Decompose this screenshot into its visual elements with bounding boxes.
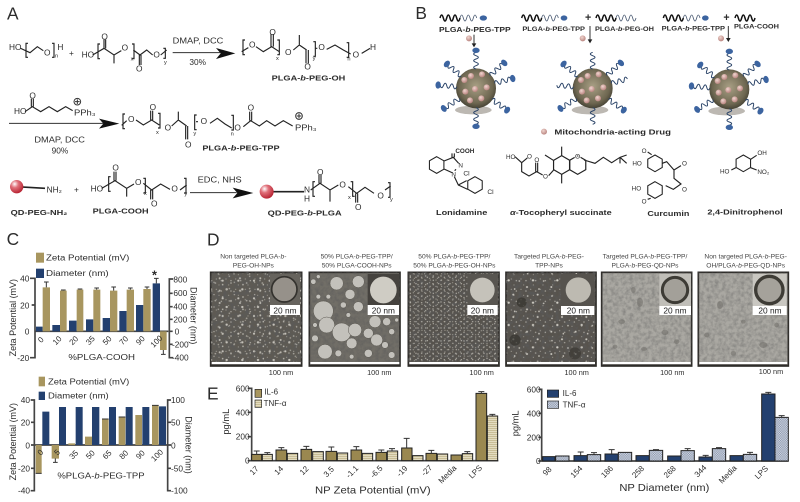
panel letter C: C [7,229,19,249]
molecule: Lonidamine: Lonidamine [436,208,487,217]
formulation 3: TPP plus COOH: PLGA-COOH [734,25,779,31]
reaction 1: reagents: O [136,64,143,74]
micrograph: non targeted PEG-OH: 20 nm [273,305,297,315]
bar chart: %PLGA-b-PEG-TPP: -40 [18,486,30,496]
molecule: Lonidamine: COOH [455,148,475,155]
product: PLGA-b-PEG-TPP: O [128,114,135,124]
arrow: DMAP, DCC 30% [173,36,235,67]
molecule: Curcumin: Curcumin [647,209,690,218]
bar chart: %PLGA-b-PEG-TPP: Zeta Potential (mV) [48,376,129,386]
bar chart: pg/mL vs NP zeta potential: Media [437,463,459,485]
bar chart: %PLGA-b-PEG-TPP: 100 [149,447,165,463]
formulation 1: PLGA-b-PEG-TPP [435,15,516,129]
micrograph: 50% TPP / 50% OH: 100 nm [469,368,494,377]
micrograph: 50% TPP / 50% OH: 20 nm [471,305,494,315]
reaction 1: reagents: y [164,60,167,66]
product: PLGA-b-PEG-OH: n [347,57,350,63]
micrograph: 50% TPP / 50% OH: 50% PLGA-b-PEG-OH-NPs [413,262,496,269]
bar chart: %PLGA-b-PEG-TPP: 50 [84,448,97,461]
molecule: alpha-Tocopheryl succinate: α-Tocopheryl succinate [510,208,612,217]
bar chart: %PLGA-b-PEG-TPP [8,376,194,496]
bar chart: %PLGA-COOH: 20 [20,300,30,310]
product: PLGA-b-PEG-TPP: O [150,102,157,112]
bar chart: %PLGA-COOH: 40 [20,274,30,284]
micrograph: 50% TPP / 50% OH: 50% PLGA-b-PEG-TPP/ [418,253,491,260]
micrograph: non targeted PEG-OH [211,253,302,377]
bar chart: %PLGA-COOH: -400 [172,353,189,363]
bar chart: %PLGA-b-PEG-TPP: Diameter (nm) [48,390,109,400]
bar chart: pg/mL vs NP diameter: 400 [527,408,541,418]
micrograph: 50% TPP / 50% COOH: 50% PLGA-b-PEG-TPP/ [321,253,393,260]
bar chart: %PLGA-b-PEG-TPP: 40 [21,395,30,405]
bar chart: pg/mL vs NP diameter: pg/mL [511,410,521,436]
micrograph: targeted TPP / QD: Targeted PLGA-b-PEG-TPP/ [603,253,688,260]
product: PLGA-b-PEG-OH: x [276,56,279,62]
reagent: carboxy TPP: HO [14,106,27,116]
panel B: nanoparticle formulations and drugs [415,3,783,218]
product: QD-PEG-b-PLGA: O [355,202,362,212]
panel letter B: B [415,3,427,23]
arrow: DMAP, DCC 30%: 30% [189,57,207,67]
panel letter D: D [207,230,220,250]
molecule: 2,4-Dinitrophenol [707,150,783,216]
micrograph: non targeted OH / QD: 100 nm [759,367,783,376]
micrograph: targeted TPP / QD [602,253,692,377]
product: PLGA-b-PEG-OH: O [318,42,325,52]
reaction 1: reagents: HO [82,49,95,59]
product: PLGA-b-PEG-OH: O [353,49,360,59]
reagent: QD-PEG-NH2: NH₂ [47,184,62,194]
bar chart: %PLGA-COOH: 50 [101,334,114,347]
reaction 1: reagents: HO [9,42,22,52]
panel letter E: E [207,383,219,403]
reagent: PLGA-COOH: PLGA-COOH [93,207,149,216]
reaction 1: reagents: H [57,42,63,52]
molecule: Lonidamine: Cl [463,171,470,178]
reaction 1: reagents: O [153,49,160,59]
molecule: alpha-Tocopheryl succinate [506,147,627,217]
bar chart: pg/mL vs NP diameter: 0 [536,456,541,466]
molecule: 2,4-Dinitrophenol: OH [757,150,767,157]
micrograph: 50% TPP / 50% OH [408,253,499,377]
product: QD-PEG-b-PLGA: x [348,195,351,201]
formulation 3: TPP plus COOH: PLGA- b-PEG-TPP [662,26,725,32]
plus sign: + [74,185,79,195]
bar chart: %PLGA-b-PEG-TPP: 35 [68,448,81,461]
bar chart: pg/mL vs NP zeta potential: NP Zeta Potential (mV) [315,486,431,497]
micrograph: non targeted PEG-OH: Non targeted PLGA-b- [220,253,286,260]
reaction 1: reagents: x [131,57,134,63]
bar chart: pg/mL vs NP zeta potential: TNF-α [264,399,287,408]
product: PLGA-b-PEG-TPP: PLGA-b-PEG-TPP [202,143,280,152]
product: PLGA-b-PEG-TPP: O [248,103,255,113]
panel E: cytokine release, zeta potential [207,383,498,497]
bar chart: %PLGA-b-PEG-TPP: -100 [171,486,188,496]
formulation 1: PLGA-b-PEG-TPP: PLGA-b-PEG-TPP [439,25,511,34]
bar chart: %PLGA-COOH: Diameter (nm) [46,268,109,278]
bar chart: pg/mL vs NP zeta potential: 3.5 [322,464,336,479]
bar chart: %PLGA-COOH [8,252,199,363]
bar chart: %PLGA-COOH: 0 [175,327,180,337]
molecule: alpha-Tocopheryl succinate: O [543,173,548,180]
reaction 1: reagents [9,31,167,74]
bar chart: %PLGA-b-PEG-TPP: 90 [134,448,147,461]
product: QD-PEG-b-PLGA: y [390,197,393,203]
molecule: Curcumin: O [642,148,647,155]
bar chart: pg/mL vs NP diameter: 600 [527,384,541,394]
product: PLGA-b-PEG-TPP: y [193,131,196,137]
bar chart: pg/mL vs NP zeta potential [221,383,498,497]
bar chart: %PLGA-COOH: 35 [84,334,97,347]
bar chart: %PLGA-COOH: 400 [173,301,188,311]
micrograph: targeted TPP / QD: 20 nm [663,306,687,316]
bar chart: %PLGA-COOH: 200 [173,315,188,325]
arrow: DMAP, DCC 90% [9,119,119,155]
bar chart: pg/mL vs NP zeta potential: 200 [236,432,250,442]
reagent: PLGA-COOH: O [151,199,158,209]
micrograph: targeted TPP: 20 nm [567,306,590,316]
bar chart: %PLGA-b-PEG-TPP: Zeta Potential (mV) [8,403,18,480]
bar chart: pg/mL vs NP diameter: 268 [662,464,678,480]
product: PLGA-b-PEG-OH: O [269,27,276,37]
bar chart: %PLGA-COOH: 10 [51,334,64,347]
product: QD-PEG-b-PLGA: O [317,167,324,177]
product: QD-PEG-b-PLGA: H [304,193,310,203]
molecule: Curcumin: O [642,199,647,206]
product: PLGA-b-PEG-OH: O [249,40,256,50]
micrograph: non targeted PEG-OH: PEG-OH-NPs [233,262,275,269]
bar chart: pg/mL vs NP diameter: 200 [527,432,541,442]
molecule: 2,4-Dinitrophenol: NO₂ [757,169,770,176]
formulation 2: TPP plus OH [522,12,654,124]
legend: mitochondria-acting drug: Mitochondria-acting Drug [554,127,671,136]
product: PLGA-b-PEG-TPP: PPh₃ [295,123,317,133]
reaction 1: reagents: O [44,47,51,57]
micrograph: targeted TPP / QD: PLGA-b-PEG-QD-NPs [612,262,679,269]
molecule: 2,4-Dinitrophenol: 2,4-Dinitrophenol [707,207,783,216]
bar chart: %PLGA-b-PEG-TPP: 0 [25,440,30,450]
bar chart: pg/mL vs NP diameter [511,384,789,494]
product: PLGA-b-PEG-TPP: x [156,130,159,136]
panel D: TEM micrographs, left half [207,230,499,377]
bar chart: pg/mL vs NP diameter: 186 [599,464,615,480]
product: PLGA-b-PEG-TPP: O [201,116,208,126]
bar chart: pg/mL vs NP zeta potential: -27 [420,463,435,478]
micrograph: 50% TPP / 50% COOH: 20 nm [372,305,395,315]
arrow: DMAP, DCC 90%: DMAP, DCC [34,134,85,144]
product: PLGA-b-PEG-OH: PLGA-b-PEG-OH [272,73,346,82]
micrograph: non targeted OH / QD: Non targeted PLGA-b-PEG- [704,253,787,260]
reagent: PLGA-COOH: O [171,184,178,194]
bar chart: %PLGA-COOH: Zeta Potential (mV) [46,252,129,262]
bar chart: %PLGA-b-PEG-TPP: 0 [171,440,176,450]
bar chart: %PLGA-b-PEG-TPP: -50 [171,464,183,474]
product: PLGA-b-PEG-TPP: O [185,139,192,149]
bar chart: %PLGA-b-PEG-TPP: 65 [101,448,114,461]
reagent: QD-PEG-NH2 [10,180,67,217]
bar chart: pg/mL vs NP diameter: IL-6 [563,389,577,398]
formulation 2: TPP plus OH: PLGA-b-PEG-OH [595,27,654,33]
molecule: Lonidamine: N [458,163,463,170]
bar chart: pg/mL vs NP zeta potential: 600 [236,383,250,393]
micrograph: targeted TPP: 100 nm [564,368,589,377]
product: QD-PEG-b-PLGA: O [339,180,346,190]
micrograph: non targeted OH / QD [698,253,788,376]
bar chart: %PLGA-b-PEG-TPP: 50 [171,417,181,427]
bar chart: pg/mL vs NP zeta potential: 17 [248,464,261,477]
bar chart: pg/mL vs NP diameter: NP Diameter (nm) [619,483,709,494]
bar chart: pg/mL vs NP diameter: 258 [630,464,646,480]
molecule: Lonidamine [429,148,494,217]
reaction 1: reagents: + [69,48,74,58]
molecule: 2,4-Dinitrophenol: HO [720,168,730,175]
bar chart: %PLGA-COOH: 20 [68,334,81,347]
product: QD-PEG-b-PLGA: QD-PEG- b-PLGA [268,209,342,218]
bar chart: %PLGA-b-PEG-TPP: 5 [52,447,62,457]
micrograph: targeted TPP: Targeted PLGA-b-PEG- [514,253,584,260]
product: QD-PEG-b-PLGA [260,167,393,218]
micrograph: non targeted PEG-OH: 100 nm [269,368,293,377]
reagent: PLGA-COOH: O [112,163,119,173]
product: PLGA-b-PEG-TPP: n [231,131,234,137]
bar chart: pg/mL vs NP zeta potential: 0 [245,456,250,466]
micrograph: non targeted OH / QD: OH/PLGA-b-PEG-QD-NPs [706,262,786,269]
reagent: QD-PEG-NH2: QD-PEG-NH₂ [11,208,67,217]
arrow: EDC, NHS [190,174,253,198]
bar chart: %PLGA-b-PEG-TPP: 20 [21,417,30,427]
bar chart: pg/mL vs NP zeta potential: -1.1 [344,463,361,480]
formulation 2: TPP plus OH: PLGA-b-PEG-TPP [522,27,585,33]
bar chart: pg/mL vs NP zeta potential: 400 [236,407,250,417]
bar chart: %PLGA-COOH: %PLGA-COOH [68,352,135,362]
product: QD-PEG-b-PLGA: N [304,185,310,195]
micrograph: 50% TPP / 50% COOH: 50% PLGA-COOH-NPs [322,262,392,269]
product: PLGA-b-PEG-TPP [122,102,317,152]
bar chart: %PLGA-b-PEG-TPP: 100 [171,395,185,405]
bar chart: %PLGA-b-PEG-TPP: Diameter (nm) [184,416,194,474]
micrograph: 50% TPP / 50% COOH [309,253,400,377]
formulation 3: TPP plus COOH: + [723,12,730,24]
bar chart: %PLGA-COOH: -20 [17,353,30,363]
reaction 1: reagents: n [55,53,58,59]
bar chart: %PLGA-COOH: 70 [118,334,131,347]
bar chart: pg/mL vs NP zeta potential: IL-6 [264,388,279,397]
bar chart: %PLGA-COOH: * [152,268,157,282]
bar chart: pg/mL vs NP diameter: TNF-α [563,400,586,409]
reagent: carboxy TPP: O [29,90,36,100]
arrow: DMAP, DCC 90%: 90% [52,145,69,155]
bar chart: pg/mL vs NP diameter: LPS [753,464,770,481]
bar chart: %PLGA-COOH: Zeta Potential (mV) [8,279,18,356]
panel D: TEM micrographs, right half [506,253,788,377]
molecule: Curcumin: HO [632,185,641,192]
bar chart: %PLGA-COOH: Diameter (nm) [189,287,199,344]
bar chart: %PLGA-b-PEG-TPP: -20 [18,464,30,474]
panel E: cytokine release, diameter [511,384,789,494]
molecule: alpha-Tocopheryl succinate: O [534,157,539,164]
product: PLGA-b-PEG-OH: O [304,61,311,71]
molecule: alpha-Tocopheryl succinate: O [527,153,532,160]
bar chart: %PLGA-COOH: 800 [173,274,188,284]
reagent: carboxy TPP [14,90,96,118]
bar chart: pg/mL vs NP zeta potential: pg/mL [221,409,231,435]
arrow: DMAP, DCC 30%: DMAP, DCC [173,36,223,46]
micrograph: non targeted OH / QD: 20 nm [758,306,782,316]
reaction 1: reagents: O [101,31,108,41]
molecule: Lonidamine: Cl [487,189,494,196]
micrograph: 50% TPP / 50% COOH: 100 nm [367,368,392,377]
reagent: PLGA-COOH: y [184,191,187,197]
reagent: PLGA-COOH: O [135,177,142,187]
product: PLGA-b-PEG-OH: y [313,56,316,62]
micrograph: targeted TPP: TPP-NPs [535,262,564,269]
formulation 2: TPP plus OH: + [585,12,591,24]
bar chart: pg/mL vs NP zeta potential: -6.5 [368,463,385,480]
molecule: Curcumin: HO [632,160,642,167]
bar chart: pg/mL vs NP zeta potential: 12 [298,464,311,477]
bar chart: %PLGA-b-PEG-TPP: %PLGA-b-PEG-TPP [57,470,145,480]
reaction 1: reagents: O [122,43,129,53]
molecule: Curcumin: O [682,187,687,194]
bar chart: %PLGA-COOH: 90 [134,334,147,347]
molecule: Curcumin: O [682,161,687,168]
product: PLGA-b-PEG-TPP: O [165,123,172,133]
reagent: PLGA-COOH: HO [91,184,104,194]
bar chart: pg/mL vs NP zeta potential: -19 [395,464,410,478]
formulation 3: TPP plus COOH [662,12,779,130]
product: PLGA-b-PEG-TPP: O [234,123,241,133]
bar chart: %PLGA-COOH: 0 [36,335,46,345]
bar chart: %PLGA-COOH: -200 [172,340,189,350]
reagent: carboxy TPP: PPh₃ [74,108,96,118]
reagent: PLGA-COOH [91,163,187,216]
bar chart: pg/mL vs NP diameter: 98 [541,465,554,478]
micrograph: targeted TPP / QD: 100 nm [660,368,685,377]
panel A: synthesis schemes [7,3,393,218]
bar chart: pg/mL vs NP diameter: 344 [693,463,709,479]
product: PLGA-b-PEG-OH: H [370,42,376,52]
bar chart: pg/mL vs NP diameter: 154 [569,464,585,480]
product: PLGA-b-PEG-OH: O [285,47,292,57]
product: QD-PEG-b-PLGA: O [377,191,384,201]
bar chart: pg/mL vs NP zeta potential: 14 [273,464,286,477]
molecule: alpha-Tocopheryl succinate: HO [506,154,516,161]
molecule: Curcumin [632,148,690,218]
bar chart: pg/mL vs NP diameter: Media [717,463,739,485]
arrow: EDC, NHS: EDC, NHS [198,174,242,184]
bar chart: %PLGA-COOH: 600 [173,288,188,298]
micrograph: targeted TPP [506,253,596,377]
bar chart: %PLGA-b-PEG-TPP: 0 [36,447,46,457]
panel C: zeta potential and diameter charts [7,229,199,496]
molecule: Lonidamine: N [451,172,456,179]
reagent: PLGA-COOH: x [144,191,147,197]
product: PLGA-b-PEG-OH [242,27,376,82]
panel letter A: A [7,3,19,23]
bar chart: pg/mL vs NP zeta potential: LPS [467,463,484,480]
bar chart: %PLGA-b-PEG-TPP: 80 [118,448,131,461]
bar chart: %PLGA-COOH: 100 [149,333,165,349]
molecule: alpha-Tocopheryl succinate: O [575,153,580,160]
bar chart: %PLGA-COOH: 0 [25,327,30,337]
